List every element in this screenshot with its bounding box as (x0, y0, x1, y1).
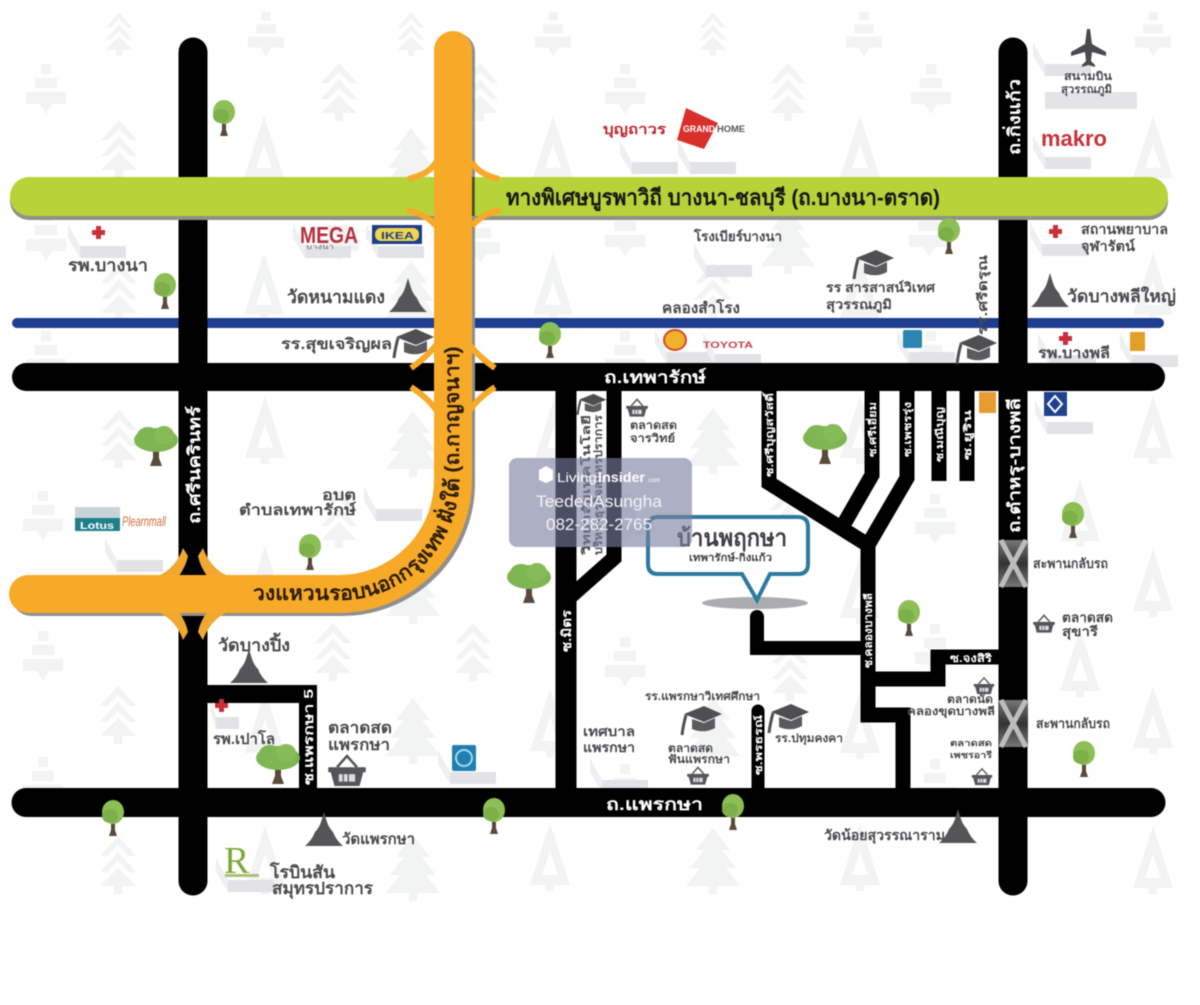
road labels: ซ.คลองบางพลี (862, 593, 875, 668)
place labels: สุขารี (1062, 624, 1098, 640)
place labels: สะพานกลับรถ (1033, 556, 1108, 571)
road labels: ถ.ศรีนครินทร์ (184, 405, 204, 524)
soi: chong siri (868, 657, 1005, 679)
road: phraeksa (26, 788, 1151, 817)
place labels: จารวิทย์ (630, 432, 675, 445)
icon: airplane (1071, 29, 1106, 67)
building pads (68, 42, 1178, 892)
road: theparak (26, 363, 1151, 391)
place labels: สุวรรณภูมิ (826, 297, 892, 313)
place labels: สุวรรณภูมิ (1061, 83, 1112, 97)
place labels: ตลาดนัด (947, 693, 993, 706)
ring road: outer bangkok ring south (8, 30, 501, 640)
road labels: ซ.มิตร (559, 610, 574, 652)
place labels: ตลาดสด (328, 720, 392, 737)
road labels: ซ.ยูริน (962, 410, 975, 460)
place labels: โรบินสัน (269, 862, 335, 882)
watermark: living insider: .com (647, 478, 660, 484)
place labels: สมุทรปราการ (272, 879, 374, 899)
road labels: ถ.กิ่งแก้ว (1002, 79, 1024, 155)
place labels: แพรกษา (583, 740, 635, 755)
place labels: วัดบางปิ้ง (218, 632, 290, 655)
icons: green trees (102, 100, 1095, 836)
place labels: บริหารธุรกิจสมุทรปราการ (592, 415, 606, 555)
icons: temples (230, 273, 1069, 846)
soi branch to mit (570, 385, 614, 597)
logo: mega bangna: บางนา (306, 244, 334, 251)
watermark: living insider: TeededAsungha (536, 492, 663, 511)
place labels: จุฬารัตน์ (1081, 238, 1135, 255)
logo: mega bangna: MEGA (300, 222, 358, 248)
road labels: ซ.แพรกษา 5 (301, 689, 316, 785)
place labels: ตลาดสด (668, 743, 713, 755)
road labels: ซ.ศรีเอี่ยม (865, 402, 879, 457)
place labels: วิทยาลัยเทคโนโลยี (579, 415, 593, 556)
icon: hospital cross paolo (215, 699, 228, 712)
road labels: ถ.แพรกษา (606, 795, 703, 814)
soi: phon thorn (752, 711, 764, 795)
place labels: ตลาดสด (630, 420, 677, 432)
soi: short one (932, 385, 946, 481)
place labels: วัดบางพลีใหญ่ (1067, 286, 1176, 307)
soi: north-east fork two (868, 385, 907, 545)
logo: tesco lotus: Lotus (80, 521, 115, 532)
place labels: วัดหนามแดง (287, 287, 385, 307)
place labels: คลองขุดบางพลี (907, 705, 995, 719)
logo: ikea: IKEA (381, 231, 414, 242)
place labels: รร.สุขเจริญผล (281, 335, 392, 354)
icon: hospital cross bang na (92, 226, 105, 239)
u-turn bridge marks on right road (999, 540, 1028, 747)
logo: tesco lotus (75, 507, 120, 532)
ring road label: วงแหวนรอบนอกกรุงเทพ ฝั่งใต้ (ถ.กาญจนาฯ) (253, 346, 465, 602)
canal: khlong samrong (17, 318, 1159, 328)
icons: school caps (394, 250, 997, 735)
soi: mit (556, 385, 576, 795)
logo: robinson: R (224, 840, 250, 882)
place labels: ตลาดสด (950, 738, 992, 748)
road labels: ถ.ตำหรุ-บางพลี (1004, 398, 1025, 533)
callout: project location: เทพารักษ์-กิ่งแก้ว (689, 550, 772, 564)
icon: hospital cross chularat (1049, 225, 1062, 238)
road labels (184, 79, 1025, 814)
watermark: living insider: 082-282-2765 (546, 515, 652, 534)
logo: bangchak upper (903, 330, 922, 348)
place labels (68, 70, 1176, 899)
place labels: รพ.บางพลี (1038, 345, 1110, 362)
place labels: รร.ศรีดรุณ (975, 255, 991, 335)
road labels: ซ.เพชรรุ่ง (902, 402, 914, 457)
expressway label: ทางพิเศษบูรพาวิถี บางนา-ชลบุรี (ถ.บางนา-ตราด) (506, 185, 940, 212)
icons: market baskets (328, 399, 1055, 786)
logo: bangkok bank (1044, 392, 1067, 416)
place labels: รพ.บางนา (68, 256, 148, 275)
logo: toyota: TOYOTA (703, 340, 754, 350)
place labels: ตลาดสด (1062, 610, 1113, 625)
place labels: คลองสำโรง (662, 298, 740, 317)
place labels: ฟันแพรกษา (668, 753, 730, 766)
place labels: เพชรอารี (950, 750, 992, 760)
place labels: รร.แพรกษาวิเทศศึกษา (645, 690, 760, 703)
soi: short two (960, 385, 974, 481)
watermark: living insider: Insider (598, 469, 646, 485)
logo: bangchak lower (452, 745, 476, 771)
place labels: แพรกษา (328, 737, 390, 754)
place labels: ตำบลเทพารักษ์ (239, 501, 356, 519)
road labels: ซ.ศรีบุญสวัสดิ์ (762, 391, 776, 477)
place labels: โรงเบียร์บางนา (693, 228, 782, 244)
ring road interchange ears (407, 162, 500, 410)
place labels: วัดแพรกษา (342, 831, 415, 848)
road labels: ซ.พรธรณ์ (753, 714, 765, 775)
soi branch diagonal (769, 385, 903, 795)
srinakarin interchange wedges (158, 548, 228, 640)
logo: plearn mall: Plearnmall (122, 513, 167, 529)
road labels: ซ.มณีบุญ (934, 406, 946, 462)
place labels: สถานพยาบาล (1081, 221, 1168, 237)
place labels: รร สารสาสน์วิเทศ (826, 280, 936, 295)
icons: airplane and hospital crosses (92, 29, 1106, 712)
logo: grand home: HOME (717, 124, 745, 134)
logo: makro: makro (1041, 126, 1107, 151)
road labels: ซ.จงสิริ (950, 652, 992, 665)
place labels: สะพานกลับรถ (1036, 716, 1110, 731)
project access road (757, 617, 868, 648)
place labels: สนามบิน (1064, 70, 1113, 83)
road: srinakarin (178, 52, 208, 881)
icon: hospital cross bang phli (1059, 332, 1072, 345)
logo: ikea (372, 225, 422, 244)
watermark: living insider: Living (557, 470, 597, 485)
logo: orange near road (979, 392, 996, 413)
road network: black roads (26, 52, 1151, 881)
place labels: รพ.เปาโล (213, 729, 275, 748)
road labels: ถ.เทพารักษ์ (604, 367, 706, 387)
logo: grand home (677, 108, 745, 149)
logo: shell (664, 330, 686, 350)
place labels: รร.ปทุมคงคา (775, 732, 843, 746)
expressway: bang na - chon buri (10, 177, 1168, 220)
callout: project location (648, 517, 808, 609)
place labels: อบต (322, 487, 356, 504)
logo: boonthavorn: บุญถาวร (603, 121, 667, 138)
callout: project location: บ้านพฤกษา (677, 525, 787, 552)
soi: phraeksa 5 (200, 694, 308, 795)
place labels: เทศบาล (583, 724, 635, 739)
logo: grand home: GRAND (683, 124, 715, 134)
logo: orange right (1130, 332, 1145, 351)
watermark: living insider (509, 458, 692, 547)
logos (75, 108, 1145, 882)
soi: north-east fork one (845, 385, 872, 522)
place labels: วัดน้อยสุวรรณาราม (824, 827, 945, 844)
road: king kaeo / tamru bang phli (998, 52, 1028, 881)
